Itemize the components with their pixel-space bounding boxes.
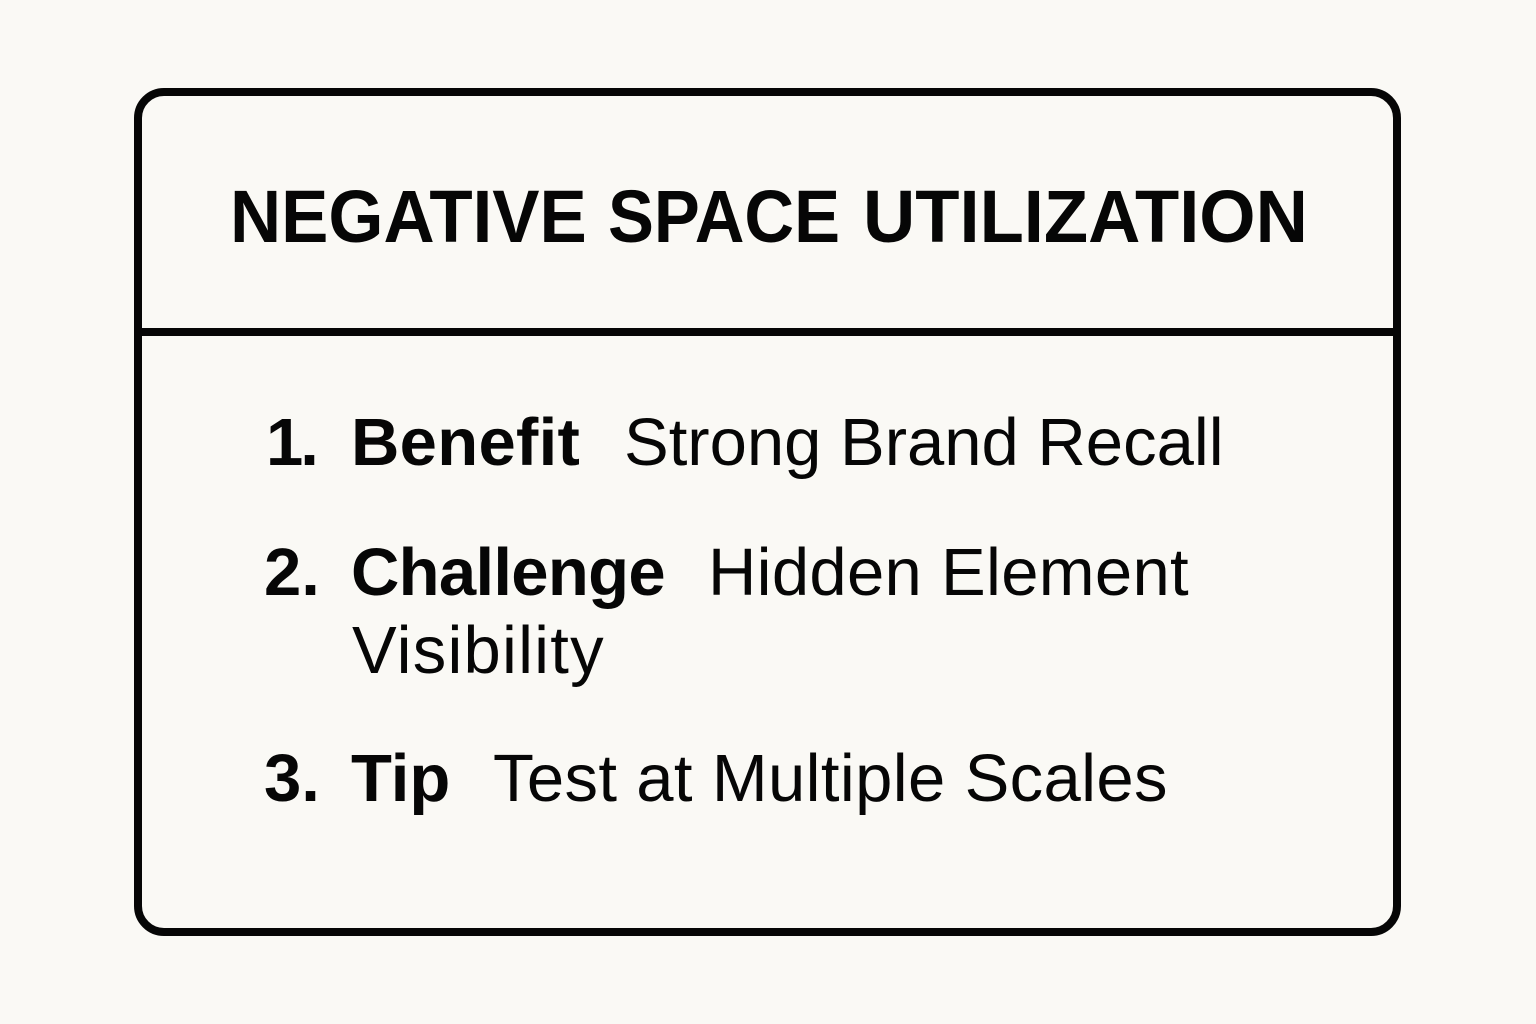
list item 1: Benefit: [351, 405, 580, 480]
list item 2: Challenge: [351, 535, 665, 610]
list item 2: Visibility: [352, 613, 605, 688]
title: NEGATIVE: [230, 175, 587, 258]
list item 1: 1.: [266, 405, 316, 480]
list item 3: Test at Multiple Scales: [493, 741, 1168, 816]
title: SPACE: [608, 175, 840, 258]
list item 2: [264, 535, 1189, 688]
panel: negative space card: [134, 88, 1401, 936]
list item 2: 2.: [264, 535, 320, 610]
title: [230, 175, 1308, 258]
list item 1: [266, 405, 1224, 480]
divider between title and list: [138, 328, 1397, 336]
list item 1: Strong Brand Recall: [624, 405, 1224, 480]
list item 3: Tip: [351, 741, 450, 816]
title: UTILIZATION: [863, 175, 1308, 258]
list item 3: 3.: [264, 741, 320, 816]
list item 2: Hidden Element: [708, 535, 1189, 610]
